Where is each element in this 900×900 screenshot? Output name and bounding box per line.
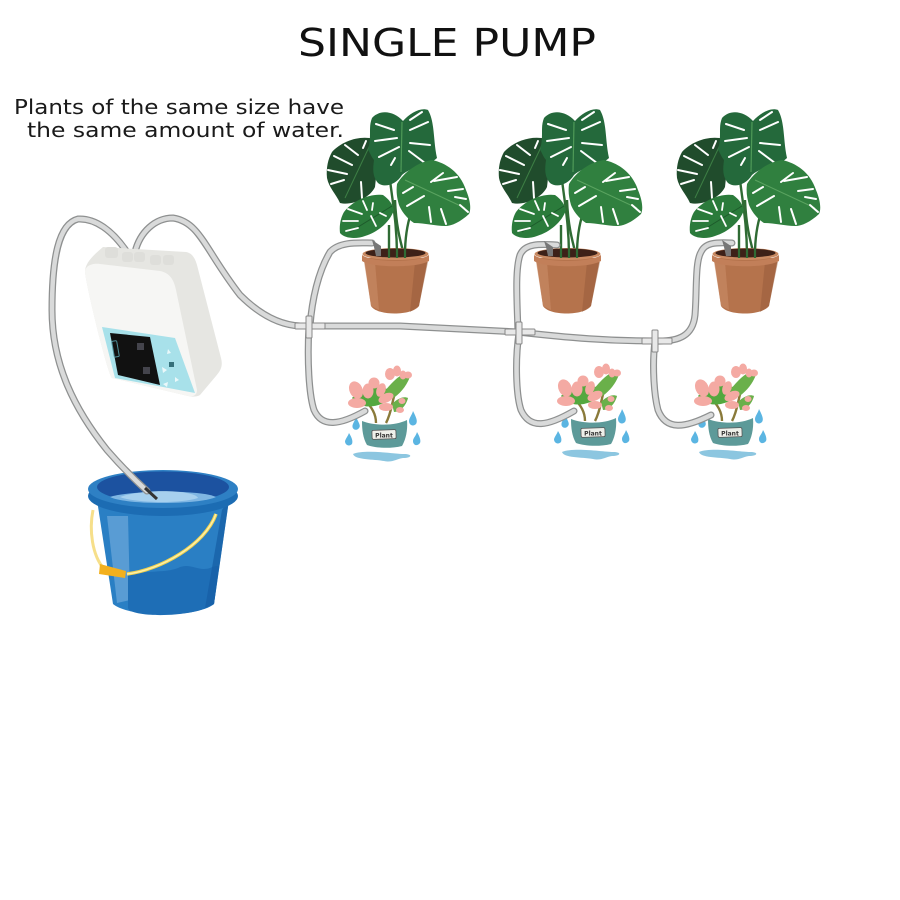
text block: caption: the same amount of water. [27,118,344,142]
device ports [105,247,174,265]
device front [85,264,197,396]
tubing [52,218,732,491]
T connector 3 [642,330,672,352]
control panel [102,327,195,393]
display [110,333,160,385]
large plant 3 [677,109,820,314]
tube nozzle in bucket [145,488,157,499]
water bucket [88,470,238,615]
title: SINGLE PUMP [298,21,596,65]
small succulent 2 [554,364,629,460]
small succulent 3 [691,364,766,460]
large plant 2 [499,109,642,314]
tube nozzles at plant pots [372,240,731,256]
text block: caption [14,95,344,142]
pump device [85,247,222,397]
panel buttons [162,349,179,387]
T connector 2 [505,322,535,344]
large plant 1 [327,109,470,314]
T connector 1 [295,316,325,338]
device body [85,247,222,397]
text block: caption: Plants of the same size have [14,95,344,119]
small succulent 1 [345,366,420,462]
